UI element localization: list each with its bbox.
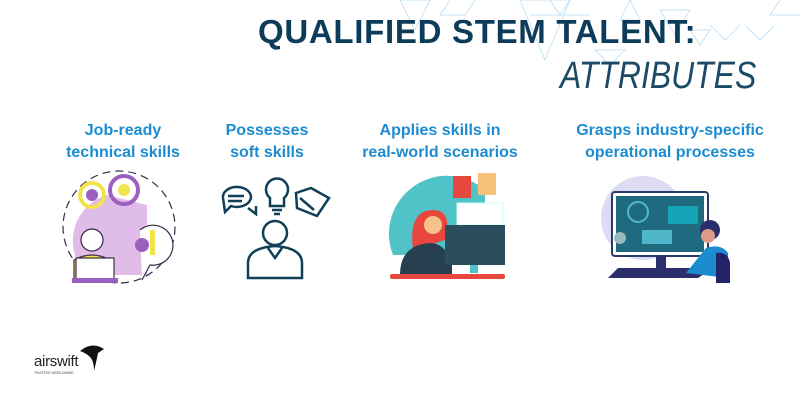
- heading: industry: [576, 122, 764, 161]
- heading: job-ready: Job-ready: [85, 122, 161, 139]
- decorative triangle pattern: [400, 0, 800, 62]
- heading: real-world: Applies skills in: [380, 122, 500, 139]
- heading: job-ready: [66, 122, 180, 161]
- heading: real-world: [362, 122, 518, 161]
- icon: soft skills: [222, 177, 331, 280]
- logo: airswift: TRUSTED WORLDWIDE: [34, 371, 74, 375]
- heading: soft skills: soft skills: [230, 144, 304, 161]
- logo: airswift: airswift: [34, 353, 78, 370]
- logo: airswift: [34, 346, 104, 375]
- title: QUALIFIED STEM TALENT:: [258, 13, 696, 50]
- title: ATTRIBUTES: [560, 55, 756, 97]
- heading: industry: Grasps industry-specific: [576, 122, 764, 139]
- icon: technical skills: [62, 170, 176, 284]
- heading: industry: operational processes: [585, 144, 755, 161]
- title: [258, 13, 756, 97]
- icon: industry processes: [601, 176, 730, 283]
- heading: job-ready: technical skills: [66, 144, 180, 161]
- heading: real-world: real-world scenarios: [362, 144, 518, 161]
- icon: real-world scenarios: [389, 173, 505, 279]
- heading: soft skills: Possesses: [226, 122, 308, 139]
- heading: soft skills: [226, 122, 308, 161]
